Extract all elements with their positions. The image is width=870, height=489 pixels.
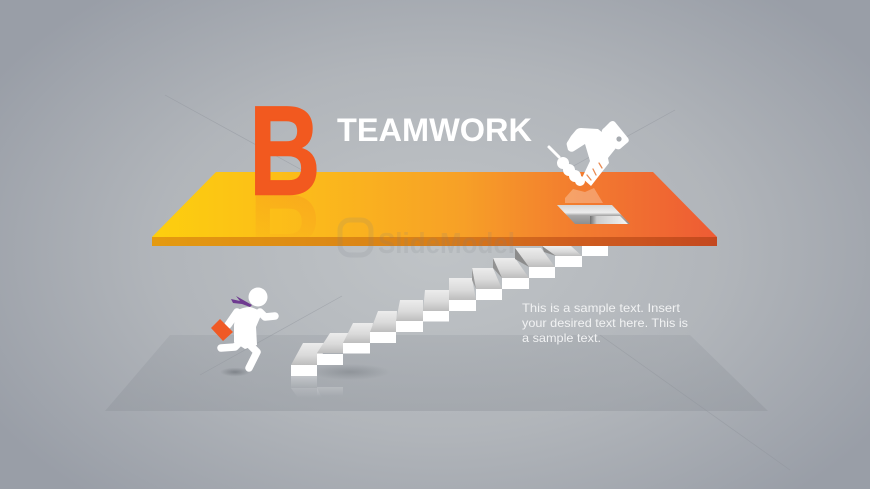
floor panel	[105, 335, 768, 411]
description text: This is a sample text. Insert	[522, 301, 681, 315]
screwdriver	[549, 147, 585, 186]
runner tie	[231, 296, 252, 307]
description text: your desired text here. This is	[522, 316, 688, 330]
description text	[522, 301, 688, 345]
letter B reflection: B	[249, 167, 321, 309]
staircase	[291, 245, 608, 376]
icon: hand with screwdriver	[549, 121, 629, 186]
letter B: B	[249, 81, 321, 222]
platform opening	[557, 205, 630, 224]
runner body	[234, 307, 262, 349]
runner limbs	[221, 312, 275, 368]
hand cuff	[602, 121, 629, 149]
icon: hand reflection	[565, 188, 603, 203]
runner shadow	[220, 368, 250, 376]
runner head	[248, 288, 268, 306]
watermark	[340, 220, 515, 260]
runner briefcase	[211, 319, 233, 341]
watermark: SlideModel	[378, 228, 515, 260]
platform	[152, 172, 717, 246]
description text: a sample text.	[522, 331, 601, 345]
platform front edge	[152, 237, 717, 246]
heading: TEAMWORK	[337, 112, 532, 148]
fingers	[587, 163, 602, 180]
hand palm	[567, 128, 616, 186]
stair shadow	[310, 364, 390, 380]
platform top	[152, 172, 717, 237]
staircase reflection	[291, 376, 343, 398]
icon: running businessman	[211, 288, 275, 368]
